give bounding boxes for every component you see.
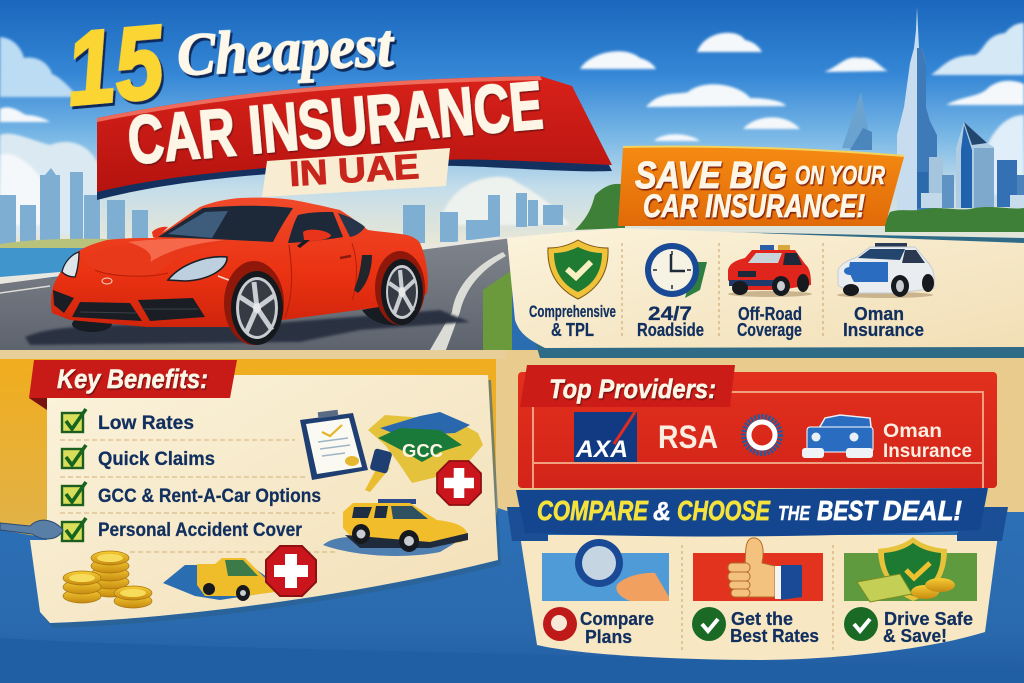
text: Comprehensive & TPL: Comprehensive — [529, 302, 616, 321]
wedge tower — [956, 122, 994, 208]
text: GCC: GCC — [402, 441, 443, 461]
banner: save big — [618, 145, 904, 226]
background: tan top strip — [0, 350, 506, 359]
title: Cheapest: Cheapest — [176, 12, 397, 88]
text: 24/7 Roadside: 24/7 — [648, 304, 692, 325]
text: Get the Best Rates — [730, 609, 819, 646]
panel: save big features — [507, 145, 1024, 358]
text: Compare Plans — [580, 609, 654, 647]
skyline: right towers — [842, 7, 1024, 210]
text: Compare Plans: Compare — [580, 609, 654, 629]
text: CAR INSURANCE!: CAR INSURANCE! — [643, 188, 865, 224]
windows — [158, 206, 293, 242]
icon: gold coins — [63, 551, 152, 608]
clouds — [0, 23, 1024, 235]
icon: check badge — [692, 607, 726, 641]
background: ocean — [0, 508, 1024, 683]
text: Oman Insurance: Oman — [854, 304, 904, 324]
text: Off-Road Coverage: Coverage — [737, 320, 802, 340]
text: Get the Best Rates: Get the — [731, 609, 793, 629]
banner: compare and choose: COMPARE — [537, 495, 649, 526]
background: sky — [0, 0, 1024, 250]
list item: Quick Claims — [62, 445, 215, 470]
text: Oman Insurance: Insurance — [843, 320, 924, 340]
text: Drive Safe and Save — [883, 609, 973, 646]
text: Oman Insurance — [843, 304, 924, 340]
car: red sports car — [25, 198, 470, 345]
ribbon: Key Benefits: Key Benefits: — [57, 364, 208, 394]
icon: red cross bottom — [266, 546, 316, 596]
text: SAVE BIG: SAVE BIG — [635, 155, 787, 197]
list item: Low Rates: Low Rates — [98, 413, 194, 434]
list item: Low Rates — [62, 409, 194, 434]
list item: Personal Accident Cover: Personal Accident Cover — [98, 520, 303, 541]
icon: red off-road car — [728, 245, 812, 297]
logo: AXA: AXA — [575, 436, 628, 463]
text: Comprehensive & TPL: & TPL — [551, 320, 594, 340]
icon: shield and cash — [857, 537, 955, 602]
icon: clock — [645, 243, 707, 298]
text: ON YOUR: ON YOUR — [795, 160, 885, 190]
mirror — [297, 230, 331, 248]
door and vent — [285, 245, 292, 318]
ribbon: Key Benefits — [29, 360, 237, 410]
title: red banner — [97, 67, 612, 200]
logo: RSA: RSA — [658, 419, 718, 455]
ribbon: Top Providers — [520, 365, 735, 407]
step: drive safe — [844, 537, 977, 646]
text: Oman Insurance: Insurance — [883, 441, 972, 462]
text: Off-Road Coverage: Off-Road — [738, 304, 802, 324]
text: 24/7 Roadside: Roadside — [637, 320, 704, 340]
trees — [575, 184, 1024, 232]
banner: compare and choose — [516, 488, 988, 536]
text: Off-Road Coverage — [737, 304, 802, 340]
text: Comprehensive & TPL — [529, 302, 616, 340]
text: Drive Safe and Save: Drive Safe — [884, 609, 973, 629]
icon: clipboard — [300, 410, 393, 492]
icon: thumbs up — [728, 538, 802, 600]
car body — [51, 198, 428, 327]
front wheel — [224, 261, 284, 345]
icon: check badge — [844, 607, 878, 641]
text: Compare Plans: Plans — [585, 627, 632, 647]
ocean bands — [0, 638, 1024, 683]
icon: magnifier and hand — [575, 539, 669, 601]
banner: compare and choose: & — [653, 496, 671, 526]
icon: small truck on map — [163, 558, 285, 601]
icon: yellow SUV — [323, 499, 468, 556]
text: Oman Insurance — [883, 421, 972, 462]
sea — [0, 245, 110, 277]
logo: AXA — [574, 412, 637, 463]
icon: pin — [0, 520, 63, 539]
banner tails — [507, 507, 1008, 541]
panel: top providers — [518, 365, 997, 488]
step: compare plans — [542, 539, 669, 647]
panel: key benefits — [0, 360, 501, 628]
banner: compare and choose: BEST — [817, 495, 879, 526]
icon: white and blue car — [837, 243, 934, 298]
background: lower left yellow — [0, 352, 506, 542]
step: best rates — [692, 538, 823, 646]
banner: compare and choose: CHOOSE — [677, 495, 771, 526]
ribbon: Top Providers: Top Providers: — [549, 374, 716, 404]
panel: compare and choose — [507, 488, 1008, 660]
rear wheel — [375, 251, 425, 325]
list item: GCC and Rent-A-Car Options: GCC & Rent-A-Car Options — [98, 486, 321, 507]
list item: Quick Claims: Quick Claims — [98, 449, 215, 470]
text: Get the Best Rates: Best Rates — [730, 626, 819, 646]
skyline: middle city — [403, 193, 563, 243]
icon: red cross top — [437, 461, 481, 505]
title: in UAE plate: IN UAE — [288, 147, 420, 194]
grilles — [53, 290, 74, 313]
title: in UAE plate — [262, 147, 450, 197]
text: Drive Safe and Save: & Save! — [883, 626, 947, 646]
banner: compare and choose: DEAL! — [883, 495, 962, 526]
title: CAR INSURANCE: CAR INSURANCE — [125, 67, 546, 179]
road — [0, 235, 512, 352]
icon: GCC map — [368, 412, 483, 483]
banner: compare and choose: THE — [778, 503, 811, 525]
headlights — [62, 252, 79, 277]
title: number 15: 15 — [62, 4, 169, 128]
text: 24/7 Roadside — [637, 304, 704, 340]
title — [62, 4, 612, 200]
icon: speech bubble — [543, 607, 577, 641]
text: Oman Insurance: Oman — [883, 421, 942, 442]
logo: blue car — [802, 415, 873, 458]
logo: ring — [744, 417, 780, 453]
background: tan right — [496, 350, 1024, 512]
icon: shield — [548, 240, 608, 299]
list item: GCC and Rent-A-Car Options — [62, 482, 321, 507]
tall tower — [897, 7, 954, 210]
skyline: left city — [0, 168, 148, 245]
